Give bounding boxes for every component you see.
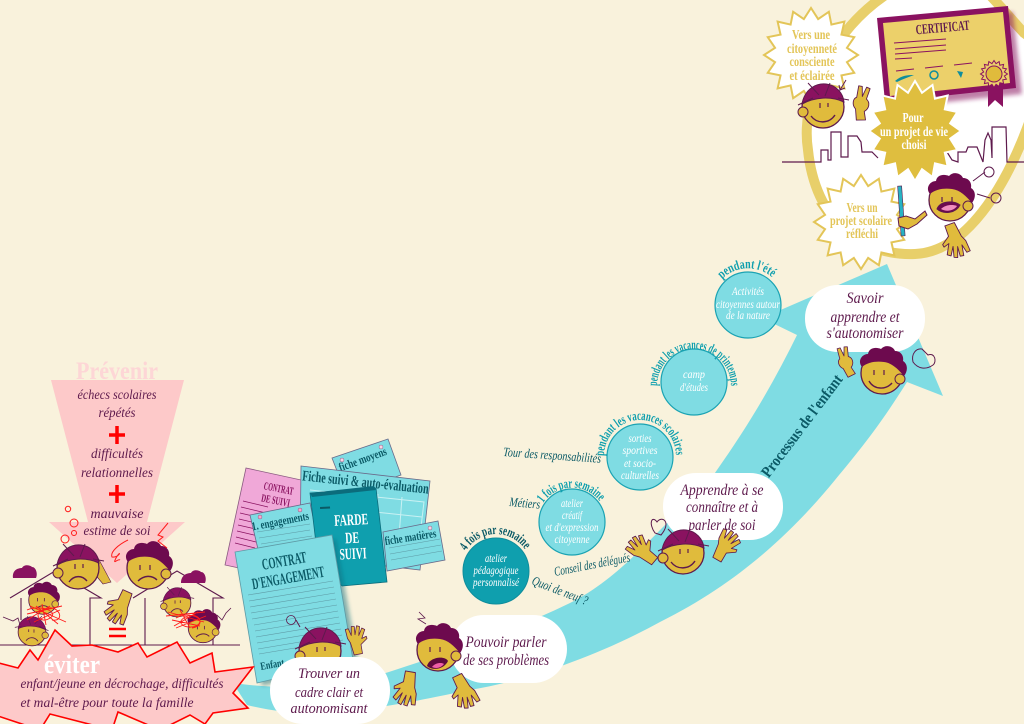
document: contrat de suivi: CONTRAT <box>263 480 295 498</box>
heading: prévenir: Prévenir <box>76 358 158 385</box>
burst: projet scolaire: réfléchi <box>846 227 878 242</box>
document: farde de suivi: DE <box>345 530 360 547</box>
circle: activités <box>714 260 782 339</box>
arrow label: Processus de l'enfant <box>758 371 847 481</box>
circle: camp d'études <box>650 342 738 416</box>
circle: atelier pédagogique: personnalisé <box>472 577 520 589</box>
icon: plus <box>109 485 125 503</box>
circle: atelier pédagogique <box>460 528 530 604</box>
bubble: apprendre <box>623 473 783 574</box>
burst: éviter: et mal-être pour toute la famille <box>20 696 194 711</box>
bubble: savoir apprendre: s'autonomiser <box>826 325 904 342</box>
circle: atelier pédagogique: atelier <box>485 553 507 565</box>
burst: projet scolaire: Vers un <box>846 201 878 216</box>
annotation: conseil des délégués: Conseil des délégués <box>553 550 631 579</box>
burst: projet de vie: Pour <box>902 111 924 126</box>
bubble: savoir apprendre: Savoir <box>846 290 884 307</box>
certificate: CERTIFICAT <box>915 19 971 38</box>
burst: projet de vie: un projet de vie <box>880 125 948 140</box>
document: engagements <box>250 503 322 575</box>
bubble: trouver un cadre: Trouver un <box>298 666 360 682</box>
funnel: prévenir: échecs scolaires <box>78 387 156 402</box>
circle: sorties: sportives <box>622 445 658 457</box>
circle: sorties: sorties <box>628 433 652 445</box>
circle: atelier créatif: atelier <box>561 498 583 510</box>
annotation: métiers: Métiers <box>508 494 541 512</box>
character: bottom with pencil <box>898 167 1001 260</box>
cloud <box>181 570 206 583</box>
document: fiche matières: fiche matières <box>384 526 437 548</box>
funnel: prévenir: difficultés <box>91 446 143 461</box>
circle: sorties: et socio- <box>624 458 656 470</box>
circle: atelier créatif <box>537 481 606 556</box>
document: fiche moyens: fiche moyens <box>337 444 389 474</box>
document: farde de suivi: FARDE <box>334 511 369 530</box>
funnel: prévenir: mauvaise <box>90 506 144 521</box>
document: fiche suivi <box>300 466 430 570</box>
burst: citoyenneté <box>764 8 858 102</box>
label: frequency: 1 fois par semaine <box>537 481 604 502</box>
burst: citoyenneté: Vers une <box>792 28 830 43</box>
houses <box>0 571 240 645</box>
equals sign <box>109 629 126 636</box>
burst: citoyenneté: citoyenneté <box>787 42 837 57</box>
burst: projet de vie: choisi <box>902 138 927 153</box>
panel: certificate ring <box>764 0 1024 269</box>
annotation: quoi de neuf: Quoi de neuf ? <box>530 573 591 608</box>
bubble: pouvoir parler: Pouvoir parler <box>465 634 547 651</box>
circle: atelier créatif: créatif <box>562 510 583 522</box>
bubble: apprendre: parler de soi <box>688 517 756 534</box>
document: contrat de suivi <box>225 468 315 580</box>
characters: unhappy family <box>3 506 231 646</box>
icon: plus <box>109 426 125 444</box>
funnel: prévenir: relationnelles <box>81 465 153 480</box>
circle: activités: citoyennes autour <box>716 299 780 311</box>
bubble: pouvoir parler: de ses problèmes <box>463 652 549 669</box>
label: period: pendant l'été <box>718 260 778 282</box>
burst: projet de vie <box>869 81 961 181</box>
bubble: savoir apprendre <box>805 285 935 394</box>
bubble: trouver un cadre <box>270 616 390 724</box>
burst: éviter <box>0 630 253 724</box>
circle: camp d'études: camp <box>683 369 705 381</box>
burst: citoyenneté: et éclairée <box>790 69 834 84</box>
bubble: apprendre: connaître et à <box>686 499 758 516</box>
bubble: savoir apprendre: apprendre et <box>830 309 900 326</box>
circle: sorties: culturelles <box>621 470 659 482</box>
document: farde de suivi <box>310 486 387 586</box>
funnel: prévenir: répétés <box>98 405 136 420</box>
document: fiche moyens <box>332 439 401 494</box>
cloud <box>13 565 37 578</box>
bubble: trouver un cadre: cadre clair et <box>295 685 364 701</box>
circle: activités: de la nature <box>726 310 770 322</box>
funnel: prévenir <box>49 358 185 583</box>
burst: projet scolaire: projet scolaire <box>830 214 892 229</box>
certificate <box>877 6 1022 108</box>
scribbles <box>27 604 206 628</box>
circle: sorties <box>598 414 682 491</box>
skyline <box>782 127 1024 162</box>
circle: atelier pédagogique: pédagogique <box>473 565 518 577</box>
label: period: pendant les vacances de printemps <box>650 342 738 386</box>
bubble: apprendre: Apprendre à se <box>680 482 764 499</box>
heading: éviter: éviter <box>44 650 100 679</box>
funnel: prévenir: estime de soi <box>84 523 151 538</box>
document: farde de suivi: SUIVI <box>339 545 367 564</box>
document: contrat d'engagement: CONTRAT <box>261 549 308 574</box>
bubble: trouver un cadre: autonomisant <box>290 701 368 717</box>
circle: camp d'études: d'études <box>680 382 708 394</box>
document: fiche matières <box>383 521 445 571</box>
document: contrat d'engagement <box>235 535 358 686</box>
document: fiche suivi: Fiche suivi & auto-évaluation <box>301 468 430 498</box>
circle: activités: Activités <box>731 286 764 298</box>
bubbles <box>61 506 168 562</box>
burst: projet scolaire <box>814 175 908 269</box>
character: top smiling <box>798 80 872 128</box>
circle: atelier créatif: et d'expression <box>546 522 599 534</box>
document: engagements: 1. engagements <box>250 509 310 533</box>
document: contrat de suivi: DE SUIVI <box>260 492 291 510</box>
document: contrat d'engagement: D'ENGAGEMENT <box>251 564 326 593</box>
document: contrat d'engagement: Enfant <box>259 657 285 673</box>
burst: citoyenneté: consciente <box>790 55 834 70</box>
circle: atelier créatif: citoyenne <box>554 534 590 546</box>
annotation: tour des responsabilités: Tour des responsabilités <box>503 444 602 466</box>
burst: éviter: enfant/jeune en décrochage, difficultés <box>20 677 224 692</box>
bubble: pouvoir parler <box>389 612 567 711</box>
label: period: pendant les vacances scolaires <box>598 414 682 456</box>
panel: documents <box>225 439 445 686</box>
label: frequency: 4 fois par semaine <box>460 528 530 550</box>
